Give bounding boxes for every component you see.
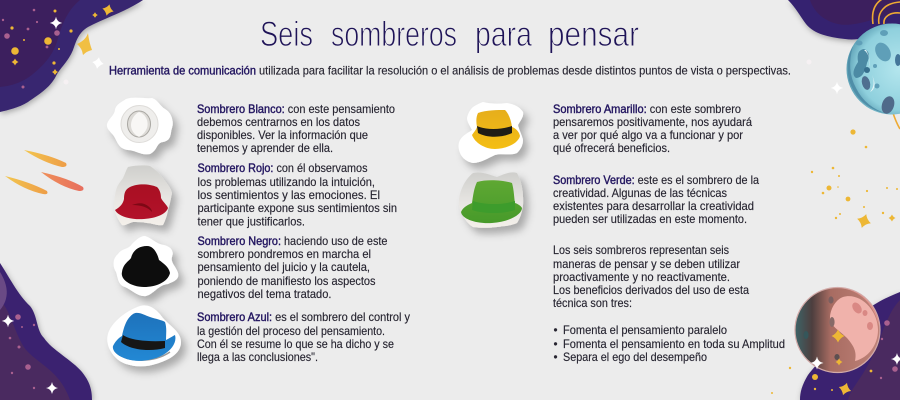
text: sombrero azul: la gestión del proceso del pensamiento. (197, 325, 385, 338)
title: Seis (260, 15, 313, 54)
text: sombrero negro: sombrero pondremos en marcha el (198, 248, 371, 261)
text: sombrero amarillo: Sombrero Amarillo: con este sombrero (553, 103, 741, 116)
decoration: bottom-right purple blob (771, 292, 900, 400)
text: sombrero amarillo (553, 103, 753, 155)
text: sombrero rojo: los sentimientos y las emociones. El (198, 189, 380, 202)
text: sombrero blanco: tenemos y aprender de ella. (197, 142, 333, 155)
list: beneficios (554, 324, 785, 364)
text: sombrero negro (198, 235, 388, 301)
text: sombrero verde: Sombrero Verde: este es el sombrero de la (553, 174, 760, 187)
title (260, 15, 639, 54)
icon: white sparkle (91, 56, 105, 70)
text: conclusión (553, 244, 750, 310)
icon: faint sparkle (64, 80, 68, 84)
hat: white (107, 98, 173, 154)
text: sombrero rojo (198, 162, 397, 228)
hat: green (459, 172, 523, 228)
text: sombrero verde: pueden ser utilizadas en este momento. (553, 213, 747, 226)
icon: white sparkle on red planet (810, 356, 824, 370)
text: conclusión: Los beneficios derivados del uso de esta (553, 284, 750, 297)
decoration: shooting streaks (5, 150, 84, 194)
intro text: Herramienta de comunicación utilizada para facilitar la resolución o el análisis de problemas desde distintos puntos de vista o perspectivas. (109, 64, 791, 78)
list: beneficios: • (554, 351, 558, 364)
text: conclusión: proactivamente y no reactivamente. (553, 271, 730, 284)
hat: yellow (458, 102, 523, 163)
hat: black (114, 236, 178, 296)
text: sombrero negro: negativos del tema tratado. (198, 288, 332, 301)
text: sombrero negro: poniendo de manifiesto los aspectos (198, 275, 376, 288)
text: conclusión: maneras de pensar y se deben utilizar (553, 258, 740, 271)
text: sombrero rojo: participante expone sus sentimientos sin (198, 202, 397, 215)
hat: blue (107, 305, 181, 366)
decoration: gold dust (811, 129, 898, 230)
text: sombrero azul (197, 311, 410, 364)
title: pensar (548, 15, 639, 54)
text: sombrero rojo: los problemas utilizando la intuición, (198, 176, 375, 189)
icon: white sparkle by moon (831, 82, 843, 94)
text: sombrero verde: creatividad. Algunas de las técnicas (553, 187, 727, 200)
icon: blue moon planet (846, 24, 900, 115)
hat: red (114, 165, 172, 225)
text: sombrero azul: Sombrero Azul: es el sombrero del control y (197, 311, 410, 324)
text: sombrero negro: pensamiento del juicio y la cautela, (198, 261, 370, 274)
text: sombrero blanco: Sombrero Blanco: con este pensamiento (197, 103, 395, 116)
title: sombreros (331, 15, 457, 54)
text: conclusión: Los seis sombreros representan seis (553, 244, 729, 257)
text: sombrero rojo: Sombrero Rojo: con él observamos (198, 162, 368, 175)
icon: gold sparkle (77, 33, 92, 55)
text: sombrero blanco: disponibles. Ver la información que (197, 129, 368, 142)
text: sombrero azul: Con él se resume lo que se ha dicho y se (197, 338, 394, 351)
icon: red planet (795, 288, 880, 372)
icon: faint sparkle top right (806, 60, 812, 64)
text: sombrero blanco: debemos centrarnos en los datos (197, 116, 360, 129)
text: sombrero verde (553, 174, 760, 226)
list: beneficios: • (554, 324, 558, 337)
text: sombrero negro: Sombrero Negro: haciendo uso de este (198, 235, 388, 248)
list: beneficios: Separa el ego del desempeño (563, 351, 707, 364)
text: sombrero rojo: tener que justificarlos. (198, 216, 305, 228)
text: sombrero verde: existentes para desarrollar la creatividad (553, 200, 754, 213)
decoration: top-left purple blob (0, 0, 143, 112)
list: beneficios: Fomenta el pensamiento paralelo (563, 324, 727, 337)
text: sombrero amarillo: qué ofrecerá beneficios. (553, 142, 670, 155)
list: beneficios: • (554, 338, 558, 351)
icon: planet rings (873, 0, 900, 129)
text: sombrero blanco (197, 103, 395, 155)
text: sombrero amarillo: pensaremos positivamente, nos ayudará (553, 116, 753, 129)
decoration: bottom-left purple blob (0, 263, 92, 400)
icon: white sparkle right (891, 353, 900, 365)
text: conclusión: técnica son tres: (553, 297, 632, 310)
decoration: top-right purple blob (788, 0, 900, 39)
title: para (475, 15, 532, 54)
text: sombrero azul: llega a las conclusiones". (197, 351, 318, 364)
list: beneficios: Fomenta el pensamiento en toda su Amplitud (563, 338, 785, 351)
text: sombrero amarillo: a ver por qué algo va a funcionar y por (553, 129, 743, 142)
decoration: top-right dark blob (810, 0, 900, 25)
